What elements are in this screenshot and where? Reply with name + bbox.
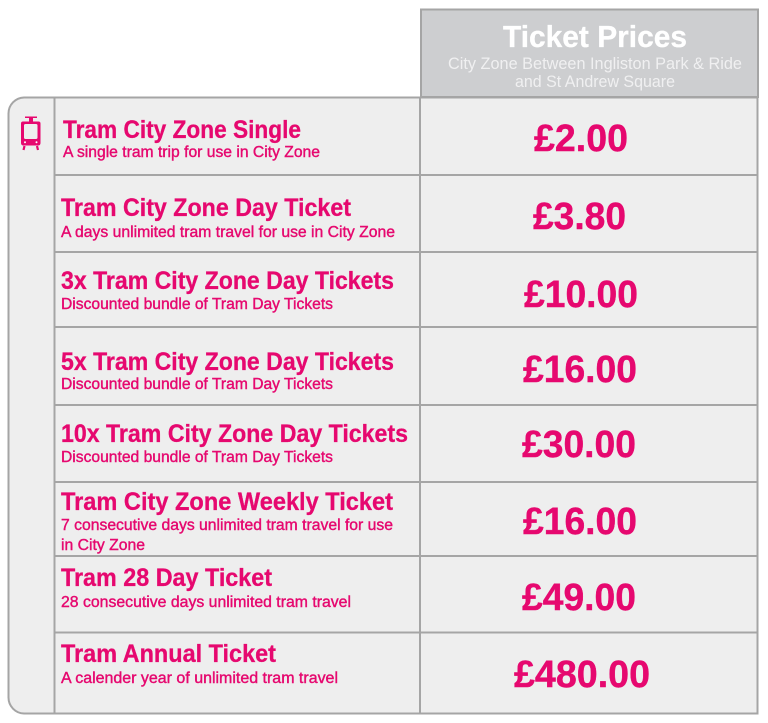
row 6: weekly ticket: 7 consecutive days unlimited tram travel for use [61,517,393,534]
row 6: weekly ticket: in City Zone [61,537,145,554]
row 8: annual ticket: Tram Annual Ticket [61,640,277,668]
row 7: 28 day ticket: £49.00 [522,577,636,619]
row 6: weekly ticket: £16.00 [523,501,637,543]
row 1: single: A single tram trip for use in City Zone [63,144,320,161]
header subtitle: and St Andrew Square [515,72,675,91]
icon: tram [21,116,40,150]
row 8: annual ticket [61,640,650,696]
row 3: 3x day tickets: 3x Tram City Zone Day Tickets [61,267,394,295]
header panel [421,10,758,97]
row 4: 5x day tickets [61,348,637,393]
row 1: single: £2.00 [534,118,628,160]
row 5: 10x day tickets: £30.00 [522,424,636,466]
header title: Ticket Prices [503,19,687,54]
row 1: single [63,116,628,161]
row 2: day ticket: Tram City Zone Day Ticket [61,194,352,222]
header subtitle [448,54,742,91]
row 8: annual ticket: £480.00 [514,654,650,696]
row 5: 10x day tickets: Discounted bundle of Tram Day Tickets [61,449,333,466]
header subtitle: City Zone Between Ingliston Park & Ride [448,54,742,73]
row 6: weekly ticket [61,488,637,554]
row 7: 28 day ticket [61,564,636,619]
row 1: single: Tram City Zone Single [63,116,301,144]
row 5: 10x day tickets: 10x Tram City Zone Day Tickets [61,420,408,448]
row 7: 28 day ticket: Tram 28 Day Ticket [61,564,273,592]
row 4: 5x day tickets: £16.00 [523,349,637,391]
row 4: 5x day tickets: Discounted bundle of Tram Day Tickets [61,376,333,393]
row 3: 3x day tickets [61,267,638,316]
row 5: 10x day tickets [61,420,636,466]
row 2: day ticket: A days unlimited tram travel for use in City Zone [61,224,395,241]
row 8: annual ticket: A calender year of unlimited tram travel [61,670,338,687]
table grid lines [54,97,758,714]
row 3: 3x day tickets: Discounted bundle of Tram Day Tickets [61,296,333,313]
row 7: 28 day ticket: 28 consecutive days unlimited tram travel [61,594,351,611]
row 3: 3x day tickets: £10.00 [524,274,638,316]
row 6: weekly ticket: Tram City Zone Weekly Ticket [61,488,394,516]
row 2: day ticket: £3.80 [533,196,626,238]
row 2: day ticket [61,194,626,241]
row 4: 5x day tickets: 5x Tram City Zone Day Tickets [61,348,394,376]
